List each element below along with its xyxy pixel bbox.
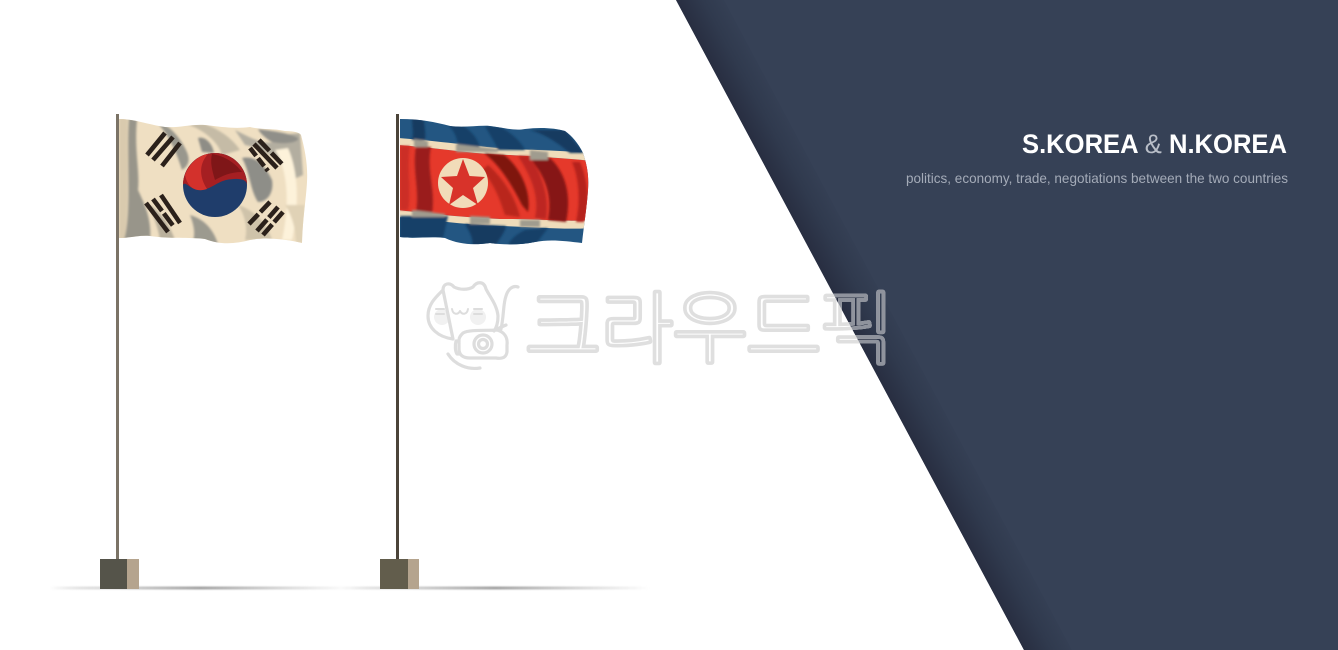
trigram: lower right xyxy=(249,202,283,235)
watermark wordmark: segment over navy panel: 크라우드픽 xyxy=(526,285,894,373)
ground shadow xyxy=(50,586,650,590)
flag: North Korea xyxy=(398,115,593,247)
flagpole base: South Korea xyxy=(100,559,139,589)
trigram: upper right xyxy=(250,140,283,171)
flagpole: North Korea xyxy=(396,114,399,560)
flag: South Korea xyxy=(115,115,310,247)
lower cream stripe xyxy=(398,210,592,229)
upper cream stripe xyxy=(398,138,592,161)
flagpole: South Korea xyxy=(116,114,119,560)
watermark icon: cat with camera xyxy=(428,283,518,368)
emblem: red star in cream circle xyxy=(438,158,488,208)
heading: S.KOREA & N.KOREA xyxy=(1022,129,1287,159)
flagpole base: North Korea xyxy=(380,559,419,589)
trigram: upper left xyxy=(147,133,180,166)
watermark wordmark: 크라우드픽 xyxy=(526,285,894,373)
taegeuk emblem xyxy=(183,153,247,217)
trigram: lower left xyxy=(146,195,180,232)
trigrams xyxy=(146,133,283,235)
red field xyxy=(398,145,592,221)
subtitle: politics, economy, trade, negotiations between the two countries xyxy=(906,170,1288,186)
watermark xyxy=(428,283,894,373)
panel: navy diagonal background xyxy=(676,0,1338,650)
